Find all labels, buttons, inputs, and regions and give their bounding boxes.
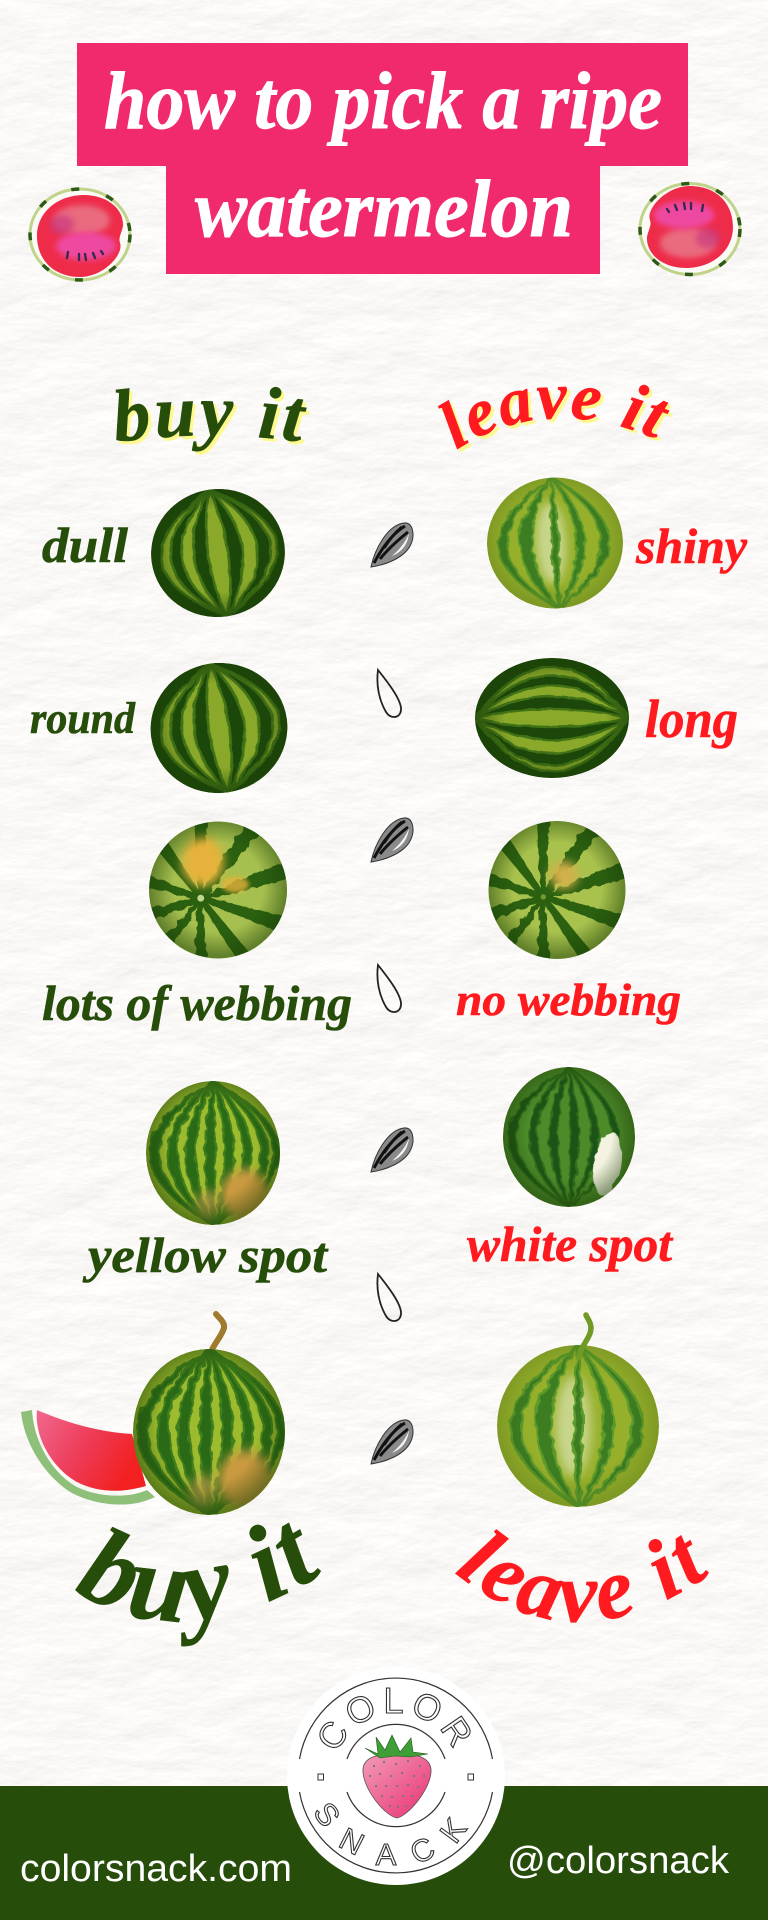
title text line 2: watermelon	[195, 163, 573, 254]
big label: buy it: buy it	[75, 1522, 321, 1646]
melon: yellow spot	[146, 1081, 280, 1225]
label: no webbing: no webbing	[456, 974, 681, 1025]
seed icon 1	[371, 523, 413, 567]
melon: lots of webbing	[86, 782, 315, 1014]
melon: white spot	[503, 1067, 635, 1207]
big label: leave it: leave it	[455, 1529, 709, 1623]
footer text: website: colorsnack.com	[20, 1848, 292, 1890]
footer band	[0, 1786, 768, 1920]
logo text: snack: SNACK	[315, 1803, 469, 1866]
footer text: handle: @colorsnack	[507, 1840, 730, 1882]
melon stem: leave	[579, 1315, 591, 1358]
heading: leave it: leave it	[438, 384, 672, 452]
seed outline 1	[377, 670, 401, 717]
melon: no webbing	[430, 780, 657, 1014]
seed outline 3	[377, 1274, 401, 1321]
melon: round	[142, 654, 296, 802]
logo badge	[287, 1668, 505, 1885]
seed icon 3	[371, 1128, 413, 1172]
melon: long	[475, 658, 629, 778]
melon: shiny	[484, 474, 626, 612]
label: lots of webbing: lots of webbing	[42, 975, 352, 1031]
melon stem: buy	[209, 1314, 224, 1358]
icon: melon slice left	[30, 189, 130, 280]
label: yellow spot: yellow spot	[83, 1227, 329, 1283]
icon: melon slice right	[640, 184, 740, 274]
title banner	[77, 43, 688, 274]
title text line 1: how to pick a ripe	[104, 55, 662, 146]
seed icon 4	[371, 1420, 413, 1464]
icon: strawberry	[363, 1735, 431, 1818]
melon: final leave	[497, 1345, 659, 1507]
label: round: round	[30, 694, 136, 743]
logo text: color: COLOR	[319, 1688, 471, 1749]
melon wedge	[21, 1410, 155, 1505]
seed icon 2	[371, 818, 413, 862]
heading: buy it: buy it	[116, 386, 310, 454]
melon: final buy	[133, 1349, 285, 1515]
label: long: long	[645, 689, 738, 749]
label: white spot: white spot	[467, 1216, 674, 1272]
seed outline 2	[377, 965, 401, 1012]
melon: dull	[143, 480, 293, 626]
label: shiny: shiny	[635, 518, 748, 574]
label: dull: dull	[42, 517, 128, 573]
